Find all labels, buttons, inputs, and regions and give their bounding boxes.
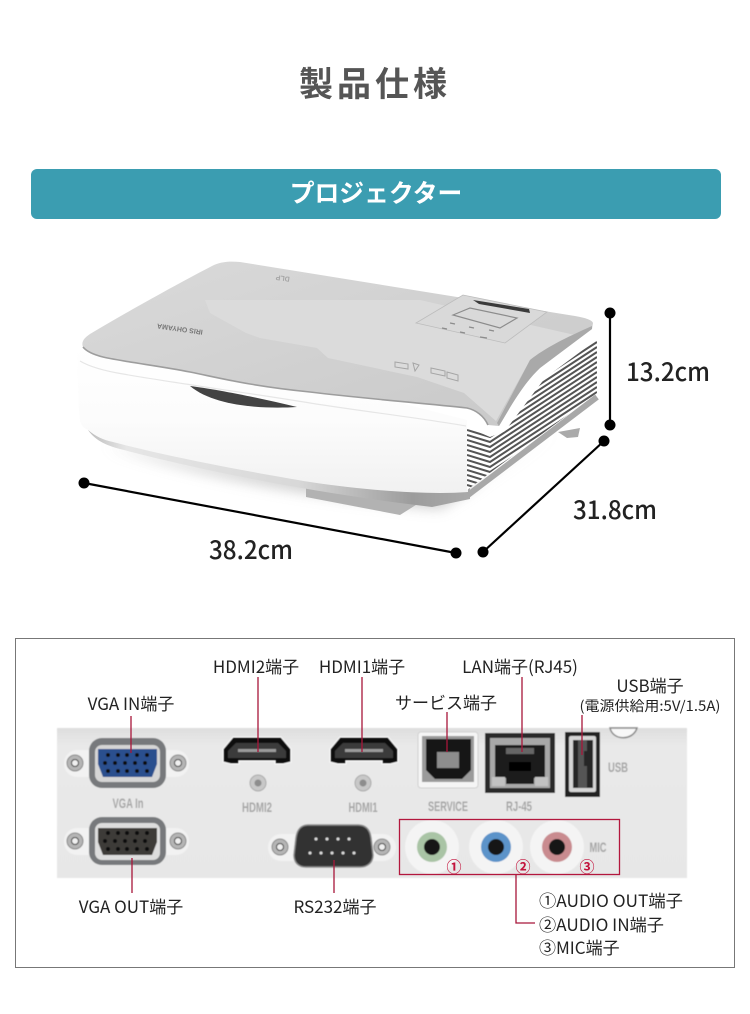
port: HDMI2: HDMI2 [242, 799, 272, 815]
label: VGA IN: VGA IN端子 [88, 690, 174, 715]
port: RJ-45 LAN [485, 733, 555, 814]
dimension: width 38.2cm: 38.2cm [209, 531, 293, 567]
port photo [57, 728, 687, 878]
port: SERVICE [418, 732, 478, 814]
port: USB [565, 732, 628, 797]
port: RS232 [268, 825, 396, 867]
port group: audio jacks: MIC [590, 839, 606, 855]
red outline around audio jacks [400, 820, 620, 874]
leader lines [131, 677, 582, 923]
control panel display [473, 300, 530, 313]
port: HDMI1 [330, 737, 398, 815]
banner heading: プロジェクター [290, 174, 462, 210]
control panel [416, 295, 547, 343]
label: audio list [539, 887, 683, 959]
DLP mark: DLP [275, 273, 290, 282]
label: service: サービス端子 [395, 689, 497, 714]
logo text on top: IRIS OHYAMA [157, 322, 203, 335]
label: HDMI1: HDMI1端子 [319, 653, 405, 678]
label: HDMI2: HDMI2端子 [213, 653, 299, 678]
body front [77, 345, 468, 493]
banner heading [31, 169, 721, 219]
port: VGA IN: VGA In [112, 795, 144, 811]
control panel buttons [442, 308, 517, 338]
label: USB: USB端子 [616, 672, 684, 697]
rim underline [80, 361, 466, 426]
port: VGA IN [64, 738, 189, 811]
ground shadow [105, 430, 560, 508]
audio jack numbers: ② [515, 859, 531, 876]
port: USB: USB [608, 759, 628, 775]
lens slot [190, 386, 297, 408]
front foot [306, 487, 419, 515]
top marks [395, 362, 458, 381]
top surface [82, 262, 593, 426]
top front dark edge [83, 347, 488, 425]
label: VGA OUT: VGA OUT端子 [79, 893, 183, 918]
port group: audio jacks [405, 820, 606, 874]
label: audio list: ③MIC端子 [539, 934, 620, 959]
silver edge band [497, 326, 592, 426]
rear foot [558, 428, 580, 438]
dimension: height 13.2cm [604, 308, 710, 430]
label: RS232: RS232端子 [294, 893, 376, 918]
under base [88, 430, 470, 507]
panel: connection ports [16, 638, 734, 968]
audio jack numbers: ③ [579, 859, 595, 876]
dimension: depth 31.8cm [478, 436, 657, 558]
dimension: width 38.2cm [78, 478, 462, 567]
port: HDMI2 [223, 737, 291, 815]
white strip beside top [488, 325, 599, 433]
strip under vents [468, 397, 597, 495]
label: USB power: (電源供給用:5V/1.5A) [580, 696, 720, 716]
dimension: height 13.2cm: 13.2cm [626, 353, 710, 389]
audio jack numbers [446, 859, 595, 876]
port: HDMI1: HDMI1 [348, 799, 378, 815]
side vents [467, 341, 597, 490]
port: SERVICE: SERVICE [428, 798, 468, 814]
audio jack numbers: ① [446, 859, 462, 876]
title: 製品仕様 [299, 57, 451, 106]
dimension: depth 31.8cm: 31.8cm [573, 491, 657, 527]
label: audio list: ②AUDIO IN端子 [539, 911, 664, 936]
label: LAN: LAN端子(RJ45) [462, 653, 578, 678]
raised top panel [205, 300, 575, 421]
port: VGA OUT [64, 817, 189, 865]
label: audio list: ①AUDIO OUT端子 [539, 887, 683, 912]
projector illustration [77, 262, 600, 515]
port: RJ-45 LAN: RJ-45 [506, 798, 532, 814]
